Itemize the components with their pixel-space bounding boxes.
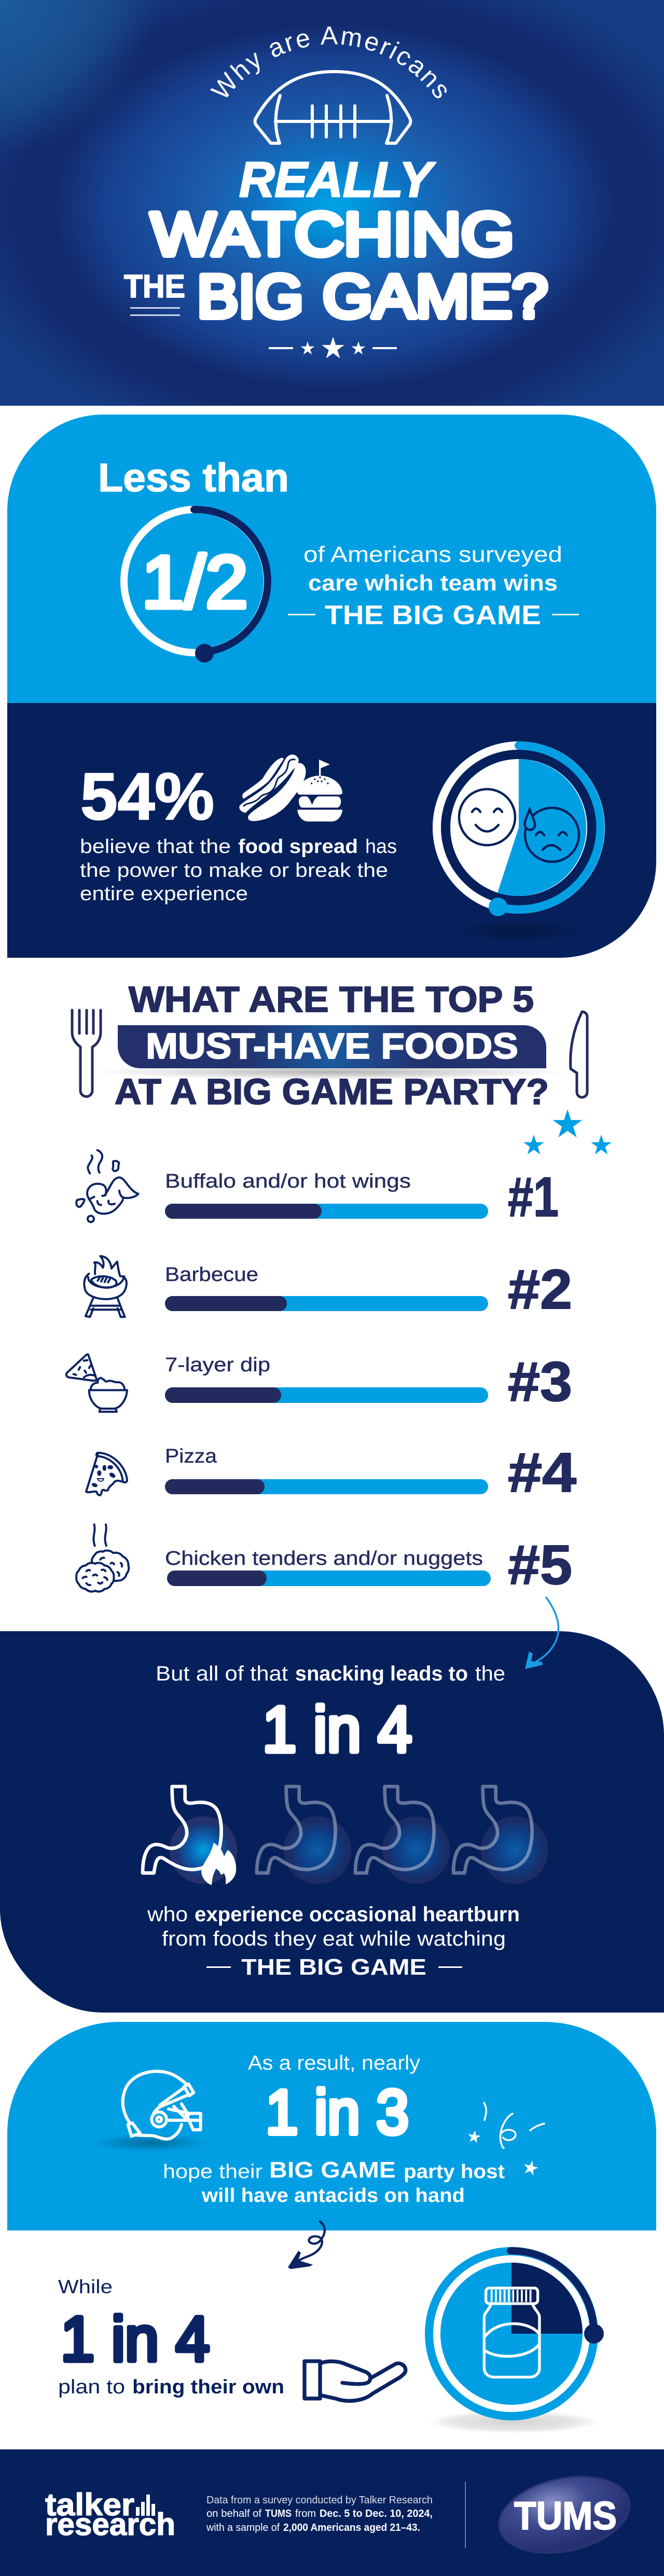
text: hope their big game party host: hope their — [163, 2161, 262, 2183]
title: BIG: BIG — [197, 263, 303, 330]
stat: 54%: 54% — [80, 760, 214, 834]
icon: antacid jar — [484, 2288, 540, 2377]
icon: stomach 2 — [257, 1786, 336, 1873]
pie chart: 54 percent — [437, 746, 601, 916]
text: believe that the food spread: has — [365, 836, 397, 858]
icon: football — [255, 72, 411, 143]
text: occasional heartburn: who — [147, 1903, 188, 1926]
rank: #3 — [508, 1350, 572, 1413]
text: of Americans surveyed: of Americans surveyed — [303, 542, 562, 567]
label: Barbecue — [165, 1264, 258, 1286]
text: survey source: 2,000 Americans aged 21–43. — [283, 2522, 420, 2533]
text: believe that the food spread: entire experience — [80, 883, 248, 905]
stat: 1 in 3: 1 in 3 — [266, 2076, 409, 2147]
text: occasional heartburn: from foods they eat while watching — [162, 1927, 506, 1950]
stars divider — [269, 337, 397, 359]
bar chart — [165, 1296, 488, 1311]
icon: chip and dip — [66, 1354, 127, 1412]
icon: knife — [571, 1012, 587, 1097]
heading line 2: MUST-HAVE FOODS — [146, 1026, 518, 1066]
stat: 1 in 4: 1 in 4 — [61, 2304, 210, 2374]
panel: antacids host — [7, 2022, 656, 2230]
rank: #2 — [508, 1258, 572, 1320]
panel: heartburn — [0, 1631, 664, 2013]
text: plan to bring their own: bring their own — [132, 2376, 284, 2398]
icon: stomach 3 — [355, 1786, 434, 1873]
text: survey source: on behalf of — [206, 2508, 261, 2519]
text: of Americans surveyed: care which team wins — [308, 571, 558, 596]
text: plan to bring their own: plan to — [58, 2376, 125, 2398]
arrow: curly — [288, 2222, 325, 2269]
text: survey source: with a sample of — [206, 2522, 280, 2533]
row: #5 chicken — [76, 1524, 572, 1596]
text: believe that the food spread: food spread — [238, 836, 358, 858]
text: survey source: Dec. 5 to Dec. 10, 2024, — [320, 2508, 433, 2519]
confetti — [467, 2103, 544, 2176]
logo: talker research: research — [45, 2507, 175, 2542]
icon: happy face — [459, 789, 515, 845]
icon: helmet — [123, 2071, 201, 2139]
title: underline — [130, 307, 180, 316]
text: of Americans surveyed: THE BIG GAME — [325, 600, 541, 630]
text: survey source — [206, 2495, 433, 2533]
heading line 3: AT A BIG GAME PARTY? — [115, 1071, 549, 1112]
heading: Less than: Less than — [98, 456, 289, 500]
icon: sad sweating face — [524, 808, 579, 862]
text: occasional heartburn: experience occasional heartburn — [195, 1903, 520, 1926]
arrow: to heartburn panel — [525, 1597, 559, 1669]
text: plan to bring their own — [58, 2376, 284, 2398]
heading line 1: WHAT ARE THE TOP 5 — [129, 979, 534, 1020]
heading banner — [118, 1025, 546, 1068]
text: occasional heartburn — [147, 1903, 520, 1980]
logo: talker research — [45, 2487, 175, 2542]
icon: open hand — [305, 2361, 406, 2401]
icon: pizza — [86, 1453, 127, 1495]
bar chart — [165, 1387, 488, 1403]
panel: food spread — [7, 703, 656, 958]
text: as a result: As a result, nearly — [248, 2052, 421, 2074]
text: believe that the food spread: believe that the — [80, 836, 231, 858]
rank: #5 — [508, 1533, 572, 1596]
icon: barbecue — [84, 1256, 127, 1317]
title: REALLY: REALLY — [239, 152, 436, 208]
ring chart: one half — [124, 509, 268, 663]
header panel — [0, 0, 664, 406]
text: hope their big game party host: will have antacids on hand — [201, 2185, 465, 2207]
icon: stars — [523, 1109, 612, 1154]
icon: hot dog and burger — [239, 754, 342, 821]
heading: top 5 foods — [72, 979, 612, 1154]
icon: stomach 4 — [453, 1786, 532, 1873]
row: #1 wings — [76, 1150, 559, 1228]
text: hope their big game party host: BIG GAME — [269, 2157, 396, 2183]
text: survey source: TUMS — [265, 2508, 292, 2519]
bar chart — [165, 1204, 488, 1219]
pie chart: one in four — [425, 2247, 604, 2420]
stat: 1 in 4: 1 in 4 — [262, 1694, 412, 1766]
icon: nuggets — [76, 1524, 129, 1592]
shadow — [93, 1064, 571, 1080]
icon glows — [170, 1816, 548, 1884]
logo: talker research: talker — [45, 2487, 134, 2522]
text: snacking leads to: the — [475, 1662, 505, 1685]
text: snacking leads to: snacking leads to — [295, 1662, 468, 1685]
row: #4 pizza — [86, 1441, 576, 1504]
text: hope their big game party host: party host — [404, 2161, 505, 2183]
bar chart — [167, 1571, 491, 1586]
stat: 1/2: 1/2 — [142, 541, 248, 624]
row: #3 dip — [66, 1350, 572, 1413]
text: survey source: from — [295, 2508, 316, 2519]
text: hope their big game party host — [163, 2157, 505, 2207]
text: of Americans surveyed — [288, 542, 579, 630]
label: 7-layer dip — [165, 1354, 270, 1376]
title: WATCHING: WATCHING — [151, 200, 514, 268]
text: believe that the food spread: the power to make or break the — [80, 860, 388, 881]
row: #2 barbecue — [84, 1256, 572, 1320]
title: THE: THE — [124, 269, 185, 305]
arched text: Why are Americans: Why are Americans — [210, 26, 447, 99]
text: snacking leads to — [156, 1662, 505, 1685]
rank: #4 — [508, 1441, 576, 1504]
footer — [0, 2449, 664, 2576]
logo: TUMS — [492, 2465, 637, 2564]
shadow — [451, 919, 586, 942]
label: Buffalo and/or hot wings — [165, 1170, 411, 1192]
panel: less than half — [7, 415, 656, 703]
text: occasional heartburn: THE BIG GAME — [241, 1954, 426, 1980]
shadow — [428, 2410, 599, 2433]
title: GAME?: GAME? — [323, 263, 548, 330]
text: while: While — [58, 2276, 113, 2297]
text: snacking leads to: But all of that — [156, 1662, 288, 1685]
text: survey source: Data from a survey conducted by Talker Research — [206, 2495, 433, 2506]
rank: #1 — [508, 1165, 559, 1228]
panel: bring their own — [58, 2247, 604, 2433]
logo: TUMS: TUMS — [514, 2494, 617, 2538]
icon: wings — [76, 1150, 139, 1222]
text: believe that the food spread — [80, 836, 397, 905]
icon: fork — [72, 1010, 101, 1097]
bar chart — [165, 1479, 488, 1494]
label: Pizza — [165, 1445, 217, 1467]
icon: stomach with flame — [143, 1786, 236, 1885]
shadow — [91, 2133, 210, 2152]
label: Chicken tenders and/or nuggets — [165, 1548, 483, 1569]
